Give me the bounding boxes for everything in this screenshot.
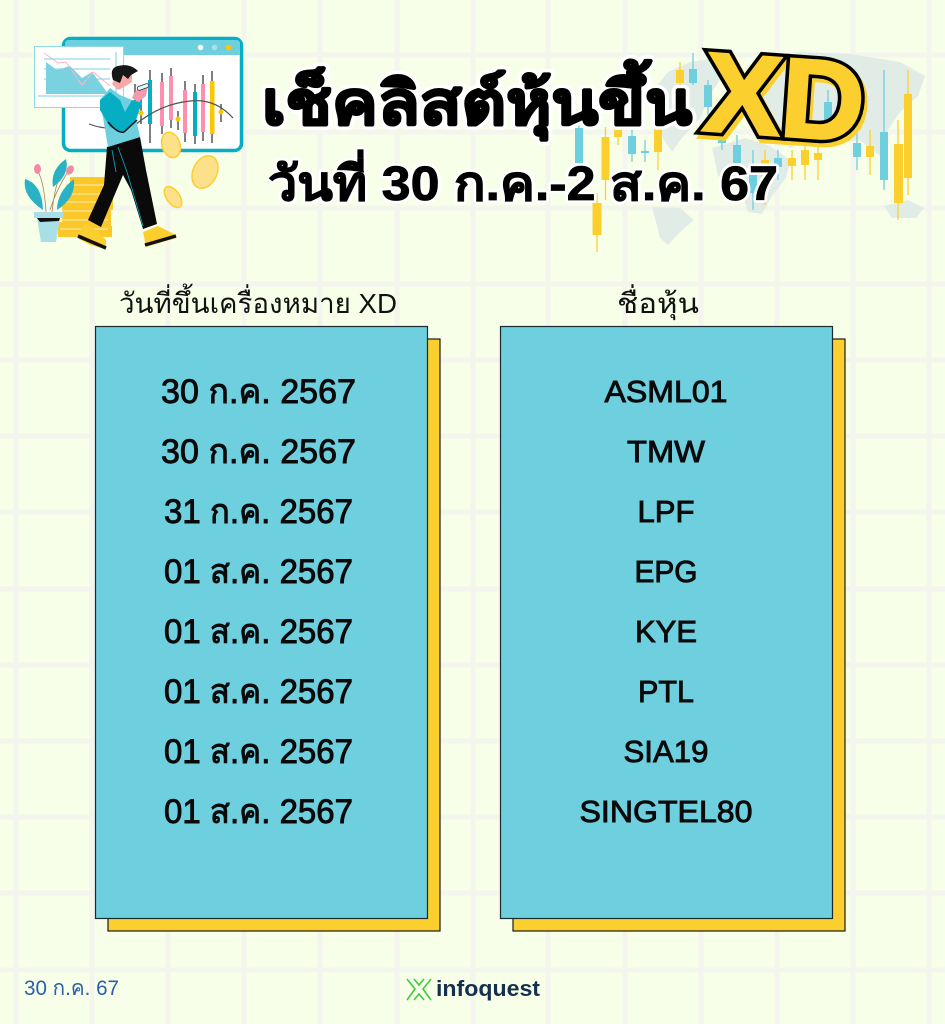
dates list bbox=[161, 373, 356, 831]
stock list bbox=[580, 374, 752, 829]
hand and phone bbox=[132, 86, 148, 102]
coins bbox=[158, 130, 223, 211]
trousers bbox=[88, 137, 157, 229]
dates list: 30 ก.ค. 2567 bbox=[161, 373, 356, 411]
stock list: PTL bbox=[638, 674, 694, 709]
column heading: dates: วันที่ขึ้นเครื่องหมาย XD bbox=[119, 283, 397, 319]
stock list: SIA19 bbox=[624, 734, 708, 769]
arm bbox=[100, 92, 142, 133]
person bbox=[78, 65, 176, 249]
dates list: 01 ส.ค. 2567 bbox=[164, 673, 353, 711]
stock list: EPG bbox=[634, 554, 698, 589]
world map with candlesticks bbox=[575, 52, 925, 252]
trading window bbox=[64, 38, 242, 150]
title: เช็คลิสต์หุ้นขึ้น bbox=[262, 59, 692, 141]
stock list: ASML01 bbox=[604, 374, 728, 409]
dates list: 01 ส.ค. 2567 bbox=[164, 553, 353, 591]
world map bbox=[652, 52, 925, 245]
XD badge: XD bbox=[700, 29, 869, 165]
icon: infoquest mark bbox=[407, 979, 431, 1000]
stock list: KYE bbox=[635, 614, 697, 649]
potted plant bbox=[25, 159, 76, 242]
column heading: stocks: ชื่อหุ้น bbox=[617, 284, 699, 321]
candles bbox=[135, 68, 221, 144]
panel: XD dates bbox=[96, 283, 440, 931]
subtitle: วันที่ 30 ก.ค.-2 ส.ค. 67 bbox=[268, 149, 778, 211]
dates list: 30 ก.ค. 2567 bbox=[161, 433, 356, 471]
XD badge: XD bbox=[703, 33, 871, 169]
left shoe bbox=[78, 223, 106, 249]
XD badge: XD bbox=[700, 29, 869, 165]
footer date: 30 ก.ค. 67 bbox=[24, 977, 119, 1000]
dates list: 01 ส.ค. 2567 bbox=[164, 733, 353, 771]
candlesticks bbox=[575, 53, 912, 252]
coin stack bbox=[58, 177, 113, 237]
title: เช็คลิสต์หุ้นขึ้น bbox=[262, 59, 692, 141]
illustration: investor with trading charts bbox=[25, 38, 242, 249]
face bbox=[112, 72, 132, 90]
subtitle: วันที่ 30 ก.ค.-2 ส.ค. 67 bbox=[268, 149, 778, 211]
panel: stock names bbox=[500, 284, 845, 931]
infoquest logo: infoquest bbox=[436, 976, 541, 1001]
dates list: 31 ก.ค. 2567 bbox=[164, 493, 353, 531]
stock list: LPF bbox=[638, 494, 694, 529]
stock list: TMW bbox=[627, 434, 706, 469]
dates list: 01 ส.ค. 2567 bbox=[164, 613, 353, 651]
hair bbox=[112, 65, 138, 83]
dates list: 01 ส.ค. 2567 bbox=[164, 793, 353, 831]
sweater bbox=[100, 88, 140, 147]
right shoe bbox=[143, 226, 176, 247]
area chart card bbox=[34, 46, 124, 108]
stock list: SINGTEL80 bbox=[580, 794, 752, 829]
